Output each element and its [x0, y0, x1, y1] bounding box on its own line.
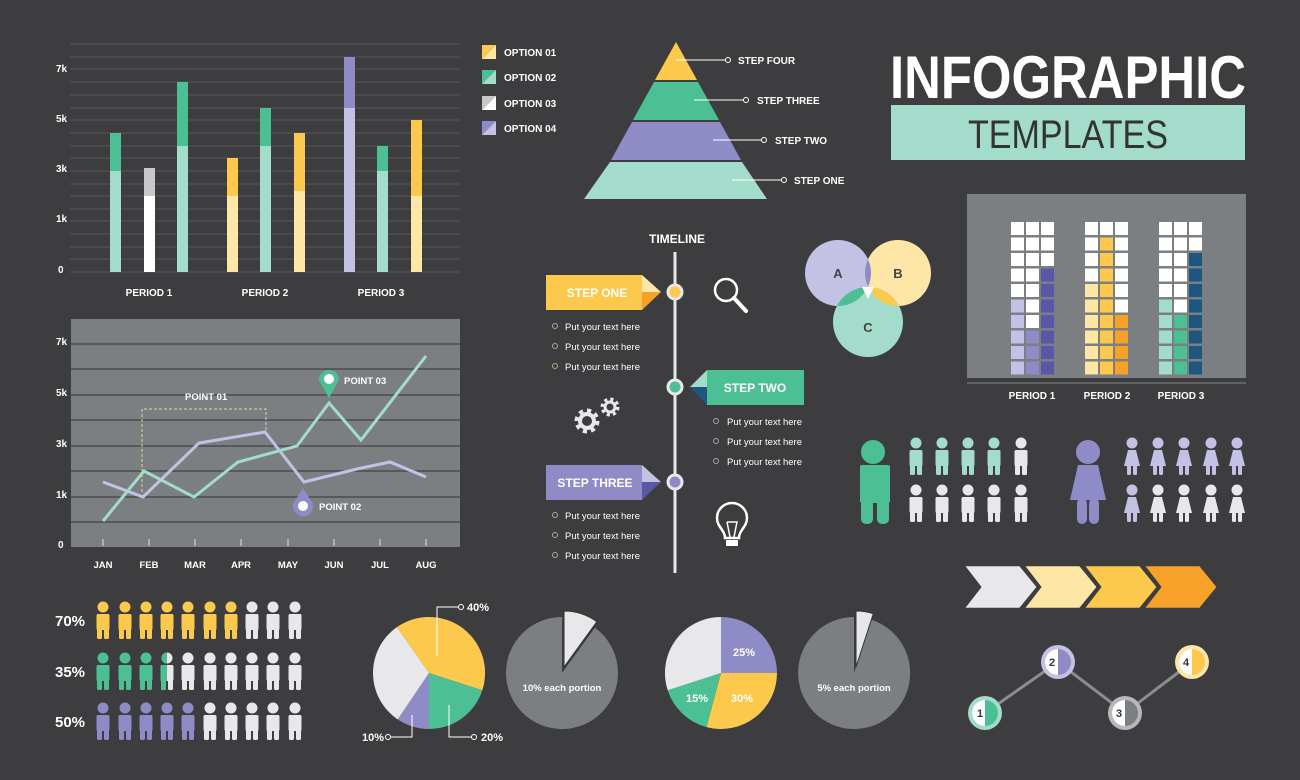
line chart	[56, 319, 460, 571]
bar chart: PERIOD 1	[126, 288, 173, 299]
pie chart 1: 20%	[481, 732, 503, 744]
venn diagram: C	[863, 320, 873, 335]
bar chart: 0	[58, 265, 64, 276]
people: female	[1070, 438, 1245, 524]
line chart: JUL	[371, 560, 389, 571]
pyramid	[584, 42, 845, 199]
title: INFOGRAPHIC	[890, 44, 1246, 111]
icon: green pin	[319, 370, 339, 398]
line chart: 7k	[56, 337, 68, 348]
line chart: 1k	[56, 490, 68, 501]
title: TEMPLATES	[968, 113, 1168, 157]
bar chart: 5k	[56, 114, 68, 125]
pie chart 3: 25%	[733, 647, 755, 659]
step one banner: STEP ONE	[567, 286, 627, 300]
timeline: Put your text here	[565, 511, 640, 522]
pyramid: STEP ONE	[794, 176, 845, 187]
pie chart 2	[506, 611, 618, 729]
pie chart 1: 10%	[362, 732, 384, 744]
legend: OPTION 04	[504, 124, 557, 135]
line chart: JAN	[93, 560, 113, 571]
bar chart: 1k	[56, 214, 68, 225]
numbered steps: 1	[977, 708, 983, 720]
timeline	[546, 232, 804, 573]
icon: magnifier	[715, 279, 746, 311]
numbered steps	[968, 645, 1209, 730]
chevron process	[963, 565, 1218, 609]
legend	[482, 45, 557, 135]
timeline: Put your text here	[565, 322, 640, 333]
timeline: Put your text here	[565, 342, 640, 353]
timeline: Put your text here	[565, 551, 640, 562]
pie chart 2: 10% each portion	[523, 683, 602, 694]
pie chart 1: 40%	[467, 602, 489, 614]
line chart: POINT 02	[319, 502, 361, 513]
venn diagram	[805, 240, 931, 357]
step one banner	[546, 275, 661, 310]
pictogram percentages: 35%	[55, 664, 85, 681]
period 2	[1085, 222, 1128, 374]
line chart: JUN	[324, 560, 344, 571]
timeline: TIMELINE	[649, 232, 705, 246]
line chart: APR	[231, 560, 251, 571]
period 3	[1159, 222, 1202, 374]
venn diagram: B	[893, 266, 903, 281]
pie chart 3: 30%	[731, 693, 753, 705]
period 1	[1011, 222, 1054, 374]
pictogram percentages: 50%	[55, 714, 85, 731]
line chart: AUG	[415, 560, 437, 571]
icon: light bulb	[717, 503, 747, 546]
people: male	[860, 438, 1028, 524]
waffle chart panel	[967, 194, 1246, 402]
line chart: POINT 01	[185, 392, 228, 403]
step two banner	[690, 370, 804, 405]
line chart: FEB	[140, 560, 159, 571]
waffle chart panel: PERIOD 3	[1158, 391, 1205, 402]
waffle chart panel: PERIOD 2	[1084, 391, 1131, 402]
legend: OPTION 02	[504, 73, 557, 84]
numbered steps: 2	[1049, 657, 1055, 669]
icon: purple drop	[293, 488, 313, 516]
timeline: Put your text here	[565, 362, 640, 373]
bar chart: 3k	[56, 164, 68, 175]
pie chart 4	[798, 611, 910, 729]
line chart: MAR	[184, 560, 206, 571]
timeline: Put your text here	[727, 457, 802, 468]
timeline: Put your text here	[565, 531, 640, 542]
bar chart: 7k	[56, 64, 68, 75]
pyramid: STEP THREE	[757, 96, 820, 107]
step two banner: STEP TWO	[724, 381, 786, 395]
numbered steps: 3	[1116, 708, 1122, 720]
pie chart 3	[665, 617, 777, 729]
legend: OPTION 01	[504, 48, 557, 59]
pictogram percentages	[55, 602, 302, 740]
pictogram percentages: 70%	[55, 613, 85, 630]
legend: OPTION 03	[504, 99, 557, 110]
numbered steps: 4	[1183, 657, 1190, 669]
timeline: Put your text here	[727, 417, 802, 428]
pyramid: STEP FOUR	[738, 56, 796, 67]
pie chart 3: 15%	[686, 693, 708, 705]
timeline: Put your text here	[727, 437, 802, 448]
line chart: POINT 03	[344, 376, 386, 387]
step three banner	[546, 465, 661, 500]
venn diagram: A	[833, 266, 843, 281]
line chart: 0	[58, 540, 64, 551]
line chart: 3k	[56, 439, 68, 450]
bar chart: PERIOD 2	[242, 288, 289, 299]
line chart: 5k	[56, 388, 68, 399]
title	[890, 44, 1246, 160]
icon: gears	[577, 400, 618, 431]
step three banner: STEP THREE	[557, 476, 633, 490]
pie chart 1	[362, 602, 503, 744]
line chart: MAY	[278, 560, 299, 571]
waffle chart panel: PERIOD 1	[1009, 391, 1056, 402]
pie chart 4: 5% each portion	[817, 683, 891, 694]
bar chart	[56, 44, 460, 299]
pyramid: STEP TWO	[775, 136, 827, 147]
bar chart: PERIOD 3	[358, 288, 405, 299]
